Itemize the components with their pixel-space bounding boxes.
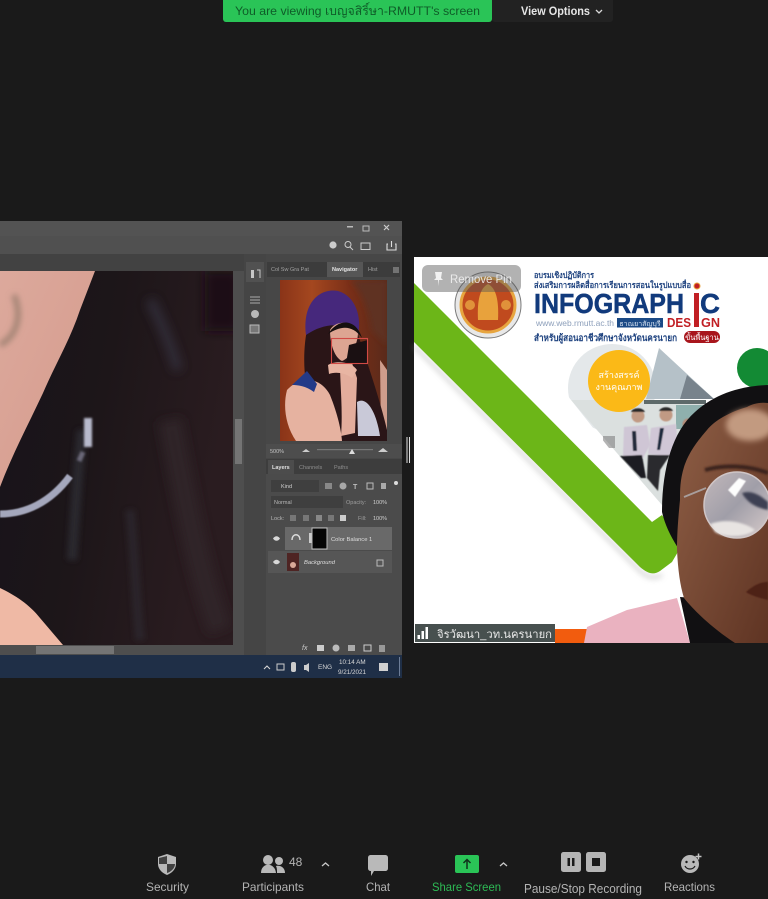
tool icons column (244, 254, 266, 655)
photo strip with people (571, 348, 714, 505)
layers footer icons (302, 644, 385, 652)
slide heading: DES (667, 316, 691, 330)
view options button: View Options (521, 6, 590, 18)
layer filter row: T (353, 484, 358, 491)
toolbar: share screen (432, 855, 507, 894)
toolbar: participants: Participants (242, 880, 304, 894)
layer filter row (271, 480, 398, 492)
slide heading: INFOGRAPH (534, 288, 684, 319)
panel: navigator: 500% (270, 449, 284, 455)
lock row: 100% (373, 516, 387, 522)
photoshop toolbar (0, 236, 402, 254)
person 1 (620, 408, 650, 478)
navigator thumbnail portrait (280, 280, 387, 441)
toolbar: chat: Chat (366, 880, 391, 894)
view options button (492, 0, 613, 22)
presenter: glasses (684, 472, 768, 538)
slide heading: อบรมเชิงปฏิบัติการ (534, 270, 594, 280)
presenter: eyebrow (705, 466, 768, 473)
layer: color balance: Color Balance 1 (331, 537, 372, 543)
slide heading (534, 270, 720, 345)
presenter: face (677, 403, 768, 643)
tab band (0, 254, 245, 271)
stripe shadow (414, 346, 662, 577)
layer: background: Background (304, 560, 336, 566)
yellow circle badge (588, 350, 650, 412)
earring (0, 418, 88, 514)
toolbar: chat (366, 855, 391, 894)
slide heading: ขั้นพื้นฐาน (685, 332, 719, 342)
panel: navigator: Navigator (332, 267, 358, 273)
blend mode row: Opacity: (346, 500, 367, 506)
windows taskbar: 9/21/2021 (338, 669, 367, 676)
panel: layers: Layers (272, 465, 290, 471)
photoshop title bar (0, 221, 402, 236)
windows taskbar (0, 655, 402, 678)
grey circle backdrop (568, 344, 656, 432)
windows taskbar: ENG (318, 664, 332, 671)
person 2 (647, 407, 678, 491)
toolbar: security (146, 854, 189, 894)
presenter: shirt (584, 598, 690, 643)
toolbar: pause and stop recording (524, 852, 642, 896)
slide heading: ธาณยาสัญบุรี (619, 320, 661, 328)
panel: layers (266, 459, 402, 655)
windows taskbar: 10:14 AM (339, 659, 366, 666)
splitter handle (406, 437, 410, 463)
green diagonal stripe (414, 283, 682, 573)
slide heading: www.web.rmutt.ac.th (535, 318, 614, 328)
panel: navigator: Hist (368, 267, 378, 273)
white band (500, 348, 662, 522)
blend mode row: Normal (274, 500, 292, 506)
panel: navigator: Col Sw Gra Pat (271, 267, 309, 273)
presenter: forehead shine (726, 409, 768, 441)
slide heading: สำหรับผู้สอนอาชีวศึกษาจังหวัดนครนายก (534, 332, 677, 345)
presenter: hair and neck (662, 385, 768, 643)
person 3 (679, 418, 694, 444)
panel: navigator (266, 254, 402, 459)
layers footer icons: fx (302, 645, 308, 652)
lock row (271, 515, 387, 522)
slide heading: ส่งเสริมการผลิตสื่อการเรียนการสอนในรูปแบบสื่อ (534, 278, 691, 291)
toolbar: reactions: Reactions (664, 880, 715, 894)
canvas: zoomed portrait (0, 271, 239, 645)
toolbar: share screen: Share Screen (432, 880, 501, 894)
blend mode row: 100% (373, 500, 387, 506)
toolbar: pause and stop recording: Pause/Stop Recording (524, 882, 642, 896)
layer: color balance (273, 527, 392, 550)
toolbar: participants: 48 (289, 855, 303, 869)
lock row: Lock: (271, 516, 285, 522)
slide heading: GN (701, 316, 720, 330)
presenter: lips (746, 582, 768, 600)
panel: layers: Paths (334, 465, 348, 471)
presenter name tag: จิรวัฒนา_วท.นครนายก (436, 629, 552, 641)
canvas scrollbars (0, 271, 244, 655)
panel: shared photoshop screen (0, 221, 402, 678)
presenter name tag (415, 624, 555, 642)
viewing banner: You are viewing เบญจสิริ์ษา-RMUTT's screen (235, 2, 480, 18)
orange slide footer bar (555, 629, 587, 643)
lock row: Fill: (358, 516, 367, 522)
yellow circle badge: สร้างสรรค์ (599, 369, 639, 380)
viewing banner (223, 0, 492, 22)
remove pin button: Remove Pin (450, 272, 512, 286)
seal logo (455, 272, 521, 338)
toolbar: reactions (664, 854, 715, 894)
toolbar: security: Security (146, 880, 189, 894)
yellow circle badge: งานคุณภาพ (596, 382, 643, 393)
green dot (737, 348, 768, 388)
panel: webcam video with slide (414, 257, 768, 643)
layer: background (268, 551, 392, 573)
panel: layers: Channels (299, 465, 322, 471)
remove pin button (422, 265, 521, 292)
slide heading: C (700, 288, 720, 319)
blend mode row (271, 496, 387, 508)
toolbar: participants (242, 855, 329, 894)
layer filter row: Kind (281, 484, 292, 490)
